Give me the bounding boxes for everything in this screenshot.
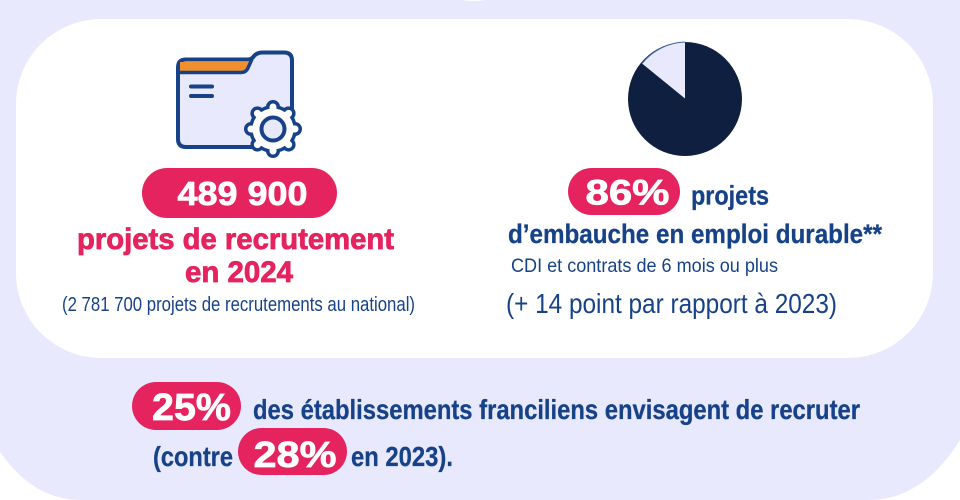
badge: 489 900: 489 900 [178,176,308,213]
text: emploi durable: d’embauche en emploi durable** [508,219,882,249]
top notch [454,0,494,1]
note: CDI: CDI et contrats de 6 mois ou plus [511,255,778,277]
badge: 28%: 28% [254,434,336,475]
note: national total: (2 781 700 projets de recrutements au national) [62,294,415,316]
badge: 28% [238,428,347,475]
text: établissements franciliens: des établissements franciliens envisagent de recruter [253,394,860,425]
note: progression: (+ 14 point par rapport à 2023) [506,288,837,319]
text: contre: (contre [153,441,233,472]
badge: 86% [568,168,680,215]
heading: projets de recrutement [77,223,394,289]
gear [249,105,297,153]
text: projets: projets [691,180,769,210]
badge: 86%: 86% [586,174,670,212]
heading: projets de recrutement: projets de recrutement [77,223,394,256]
badge: 25% [132,382,241,430]
panel: key figures [16,19,933,358]
text: en 2023: en 2023). [351,441,453,472]
badge: 489 900 [142,168,337,218]
icon: folder with gear [178,52,297,153]
badge: 25%: 25% [152,387,231,429]
pie chart: 86% [628,42,742,156]
heading: projets de recrutement: en 2024 [185,256,293,289]
